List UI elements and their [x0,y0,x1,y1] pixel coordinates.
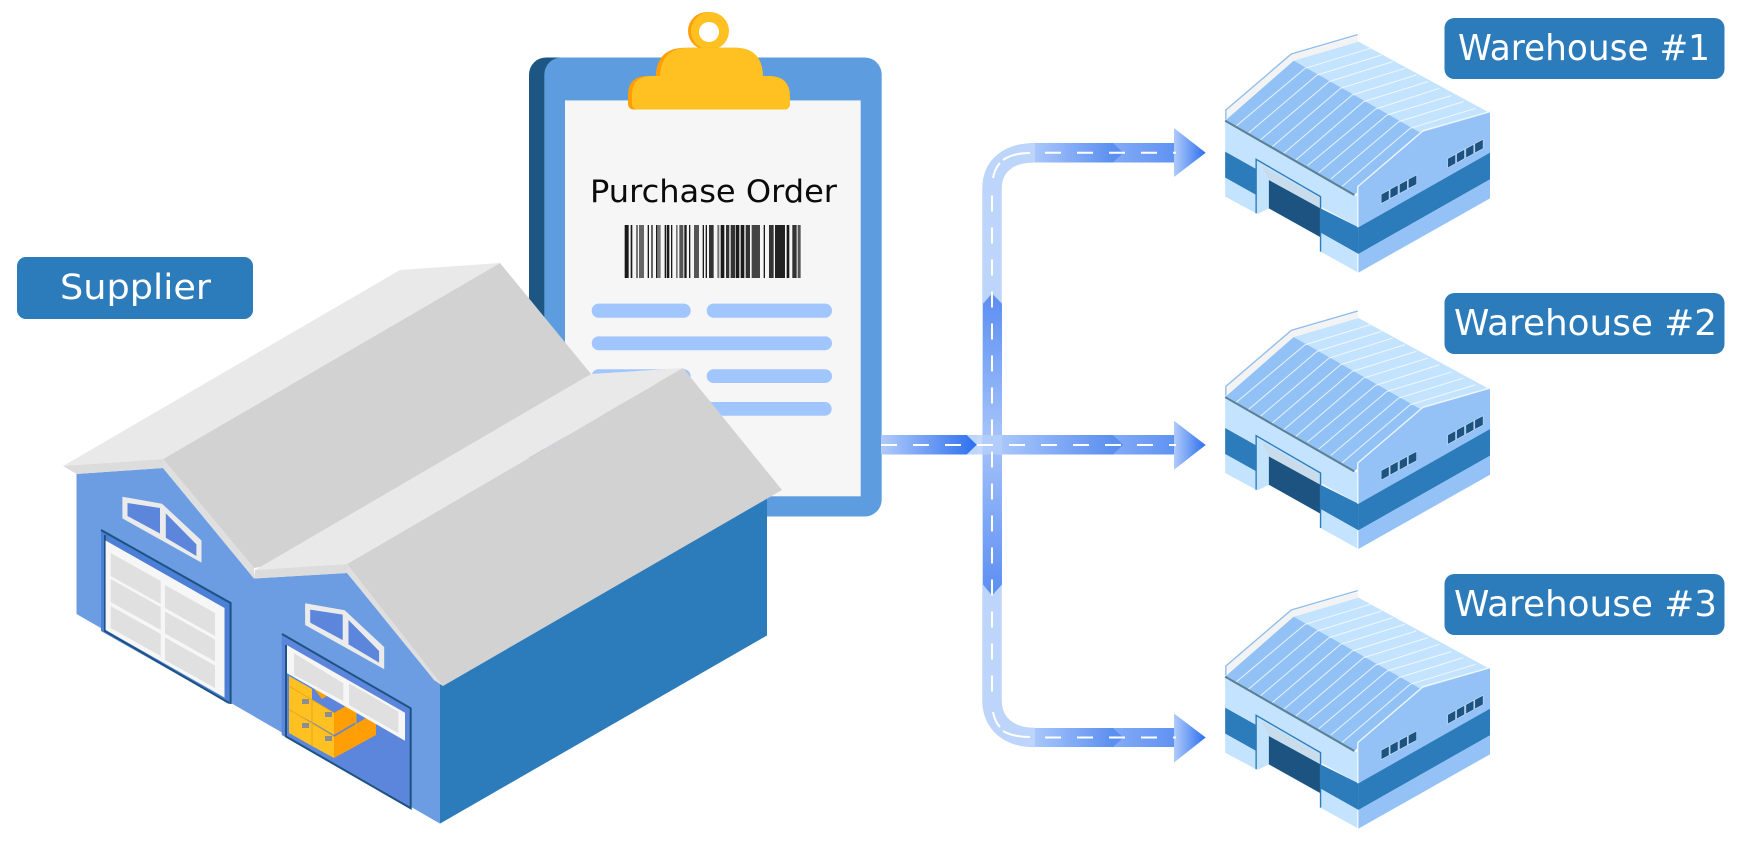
label: warehouse 3: Warehouse #3 [1454,584,1717,625]
clipboard board [544,58,882,516]
barcode [625,225,801,278]
label: warehouse 1 [1444,18,1724,79]
boxes [289,676,376,758]
label: supplier: Supplier [60,268,212,308]
label: supplier [17,257,253,319]
panel: purchase order clipboard [529,12,882,516]
window: right gable [305,603,384,669]
heading: purchase order: Purchase Order [590,174,837,210]
window: left gable [122,497,202,563]
building front wall [76,468,443,824]
paper sheet [565,100,861,496]
warehouse 3 [1225,591,1490,829]
left garage door [101,530,231,704]
right loading door with boxes [282,634,411,808]
road dashes [881,153,1176,737]
arrow: to warehouse 3 [1035,714,1206,762]
warehouse 1 [1225,35,1490,273]
clipboard back [529,58,869,516]
building side wall [440,490,767,824]
icon: clipboard clip [628,12,790,110]
roof: front section [254,368,782,686]
label: warehouse 2 [1444,293,1724,354]
arrow: vertical trunk with branches [983,153,1035,737]
arrow: to warehouse 2 [881,421,1206,470]
roof: rear section [63,263,610,578]
label: warehouse 1: Warehouse #1 [1458,28,1710,69]
form lines [592,304,832,416]
warehouse 2 [1225,311,1490,549]
label: warehouse 2: Warehouse #2 [1454,303,1717,344]
panel: supplier building [63,263,782,824]
arrow: to warehouse 1 [1035,128,1206,177]
label: warehouse 3 [1444,574,1724,635]
